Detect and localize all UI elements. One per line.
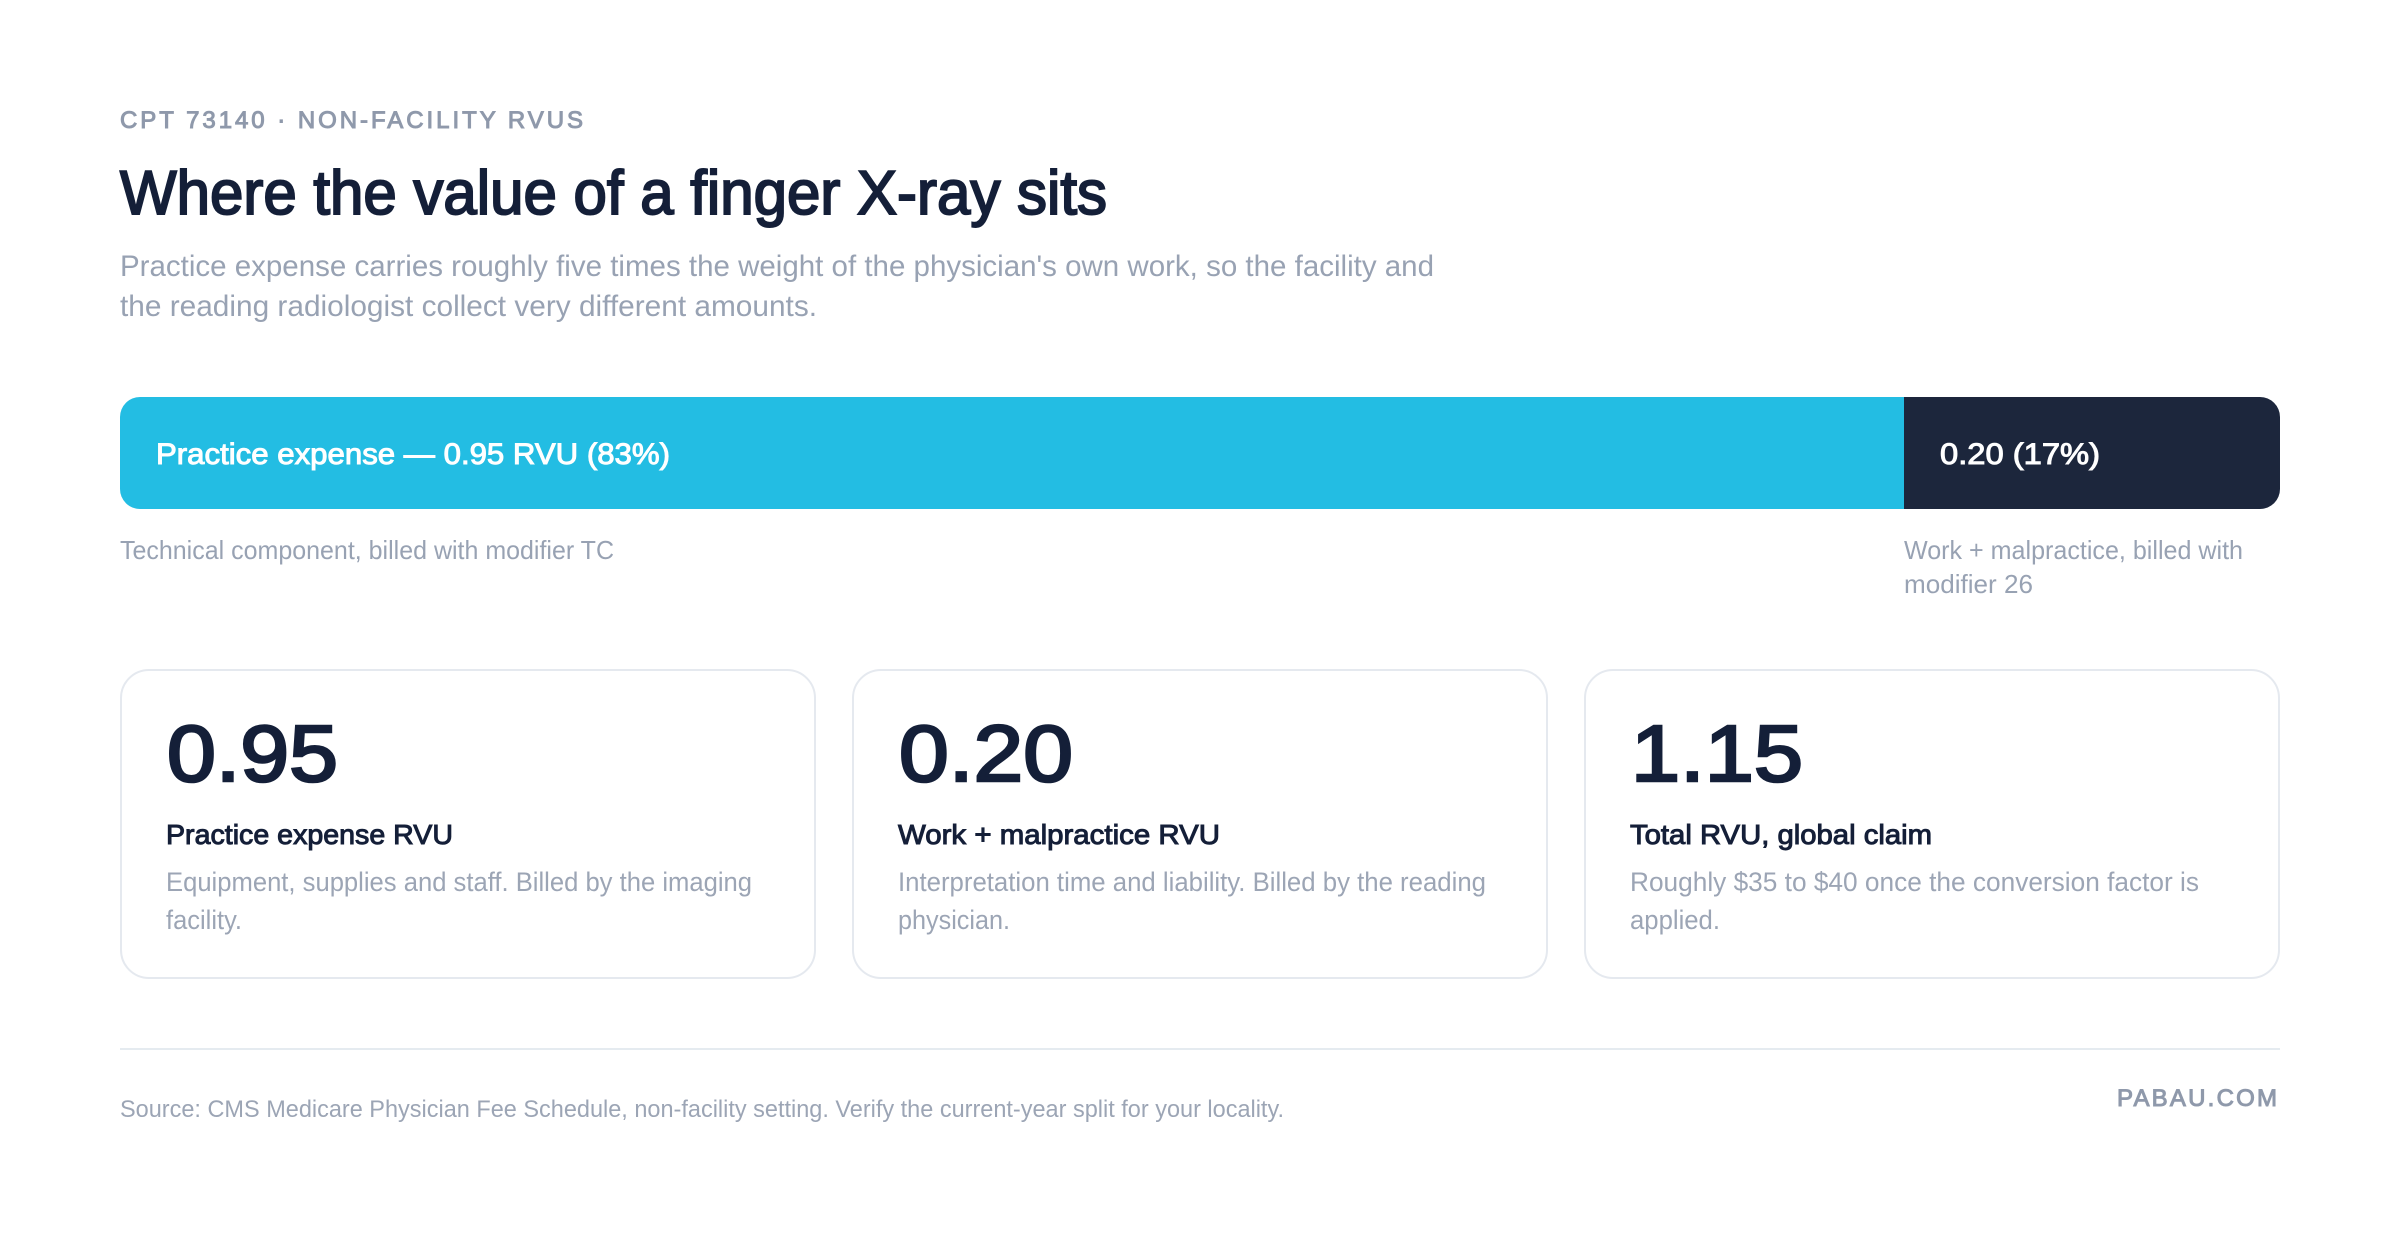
stat card: practice expense: [121, 670, 815, 978]
brand mark: PABAU.COM: [2117, 1085, 2277, 1112]
bar segment: practice expense: Practice expense — 0.95 RVU (83%): [156, 438, 670, 471]
bar segment: practice expense: [120, 397, 1904, 509]
caption: professional component: [1904, 535, 2243, 599]
stat value: 0.95: [167, 709, 338, 798]
stat description: [898, 867, 1486, 935]
subtitle: [120, 250, 1434, 323]
stat heading: Practice expense RVU: [166, 819, 453, 850]
bar segment: work + malpractice: 0.20 (17%): [1940, 438, 2100, 471]
stat heading: Work + malpractice RVU: [898, 819, 1220, 850]
stat description: applied.: [1630, 905, 1720, 935]
stat card: work + malpractice: [853, 670, 1547, 978]
stat description: facility.: [166, 905, 242, 935]
stat description: [166, 867, 752, 935]
stat heading: Total RVU, global claim: [1630, 819, 1932, 850]
stacked bar chart: [120, 397, 2280, 509]
stat value: 0.20: [899, 709, 1073, 798]
stat description: Roughly $35 to $40 once the conversion factor is: [1630, 867, 2199, 897]
stat description: physician.: [898, 905, 1010, 935]
stat value: 1.15: [1631, 709, 1803, 798]
bar segment: work + malpractice: [1904, 397, 2280, 509]
caption: technical component: Technical component, billed with modifier TC: [120, 535, 614, 565]
stat description: Interpretation time and liability. Billed by the reading: [898, 867, 1486, 897]
stat description: [1630, 867, 2199, 935]
stat card: total: [1585, 670, 2279, 978]
subtitle: the reading radiologist collect very different amounts.: [120, 290, 817, 323]
stat description: Equipment, supplies and staff. Billed by the imaging: [166, 867, 752, 897]
caption: professional component: modifier 26: [1904, 569, 2033, 599]
title: Where the value of a finger X-ray sits: [120, 159, 1107, 228]
source note: Source: CMS Medicare Physician Fee Schedule, non-facility setting. Verify the current-year split for your locality.: [120, 1096, 1284, 1123]
subtitle: Practice expense carries roughly five times the weight of the physician's own work, so the facility and: [120, 250, 1434, 283]
caption: professional component: Work + malpractice, billed with: [1904, 535, 2243, 565]
eyebrow label: CPT 73140 · NON-FACILITY RVUS: [120, 107, 583, 134]
